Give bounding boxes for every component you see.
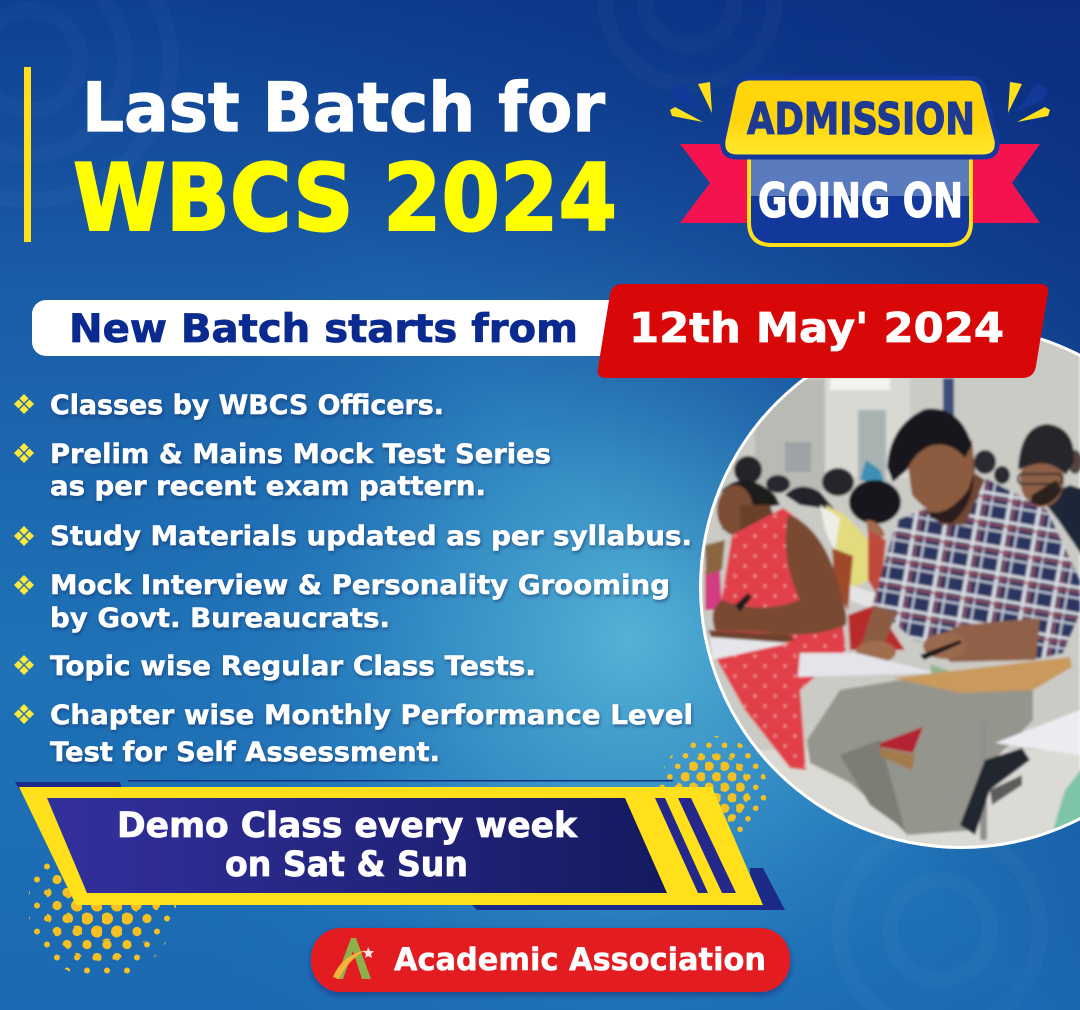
icon: bullet (14, 443, 34, 463)
trousers (807, 680, 1033, 835)
academic association pill (311, 928, 790, 992)
feature list (14, 390, 693, 768)
icon: bullet (14, 394, 34, 414)
papers (798, 653, 937, 677)
icon: bullet (14, 704, 34, 724)
admission plate: ADMISSION (747, 94, 975, 145)
man in plaid shirt (798, 409, 1080, 840)
title: Last Batch for (82, 69, 605, 148)
background students (734, 456, 762, 484)
title (73, 69, 617, 252)
halftone dots: lower left (28, 831, 176, 979)
admission plate (723, 78, 997, 157)
item: mock interview: Mock Interview & Personality Grooming (50, 570, 670, 601)
shirt (873, 477, 1080, 660)
white label: New Batch starts from (69, 307, 578, 352)
icon: left sparks (670, 82, 712, 122)
hair (887, 409, 972, 482)
ribbon (680, 144, 1040, 223)
item: performance test: Chapter wise Monthly Performance Level (50, 700, 693, 731)
woman in coral dress (708, 480, 846, 770)
icon: bullet (14, 575, 34, 595)
new batch bar (32, 284, 1048, 378)
item: performance test: Test for Self Assessment. (50, 737, 440, 768)
item: mock interview (14, 570, 670, 634)
accent bar (24, 67, 31, 242)
academic association pill: Academic Association (394, 942, 766, 978)
item: mock test series (14, 439, 551, 502)
patterned cloth (1052, 768, 1080, 829)
badge: admission going on (670, 78, 1050, 245)
item: mock interview: by Govt. Bureaucrats. (50, 603, 390, 634)
red date box: 12th May' 2024 (629, 304, 1004, 352)
paper on next desk (995, 710, 1080, 755)
item: class tests: Topic wise Regular Class Tests. (50, 651, 536, 682)
icon: academic association logo (333, 938, 374, 979)
title: WBCS 2024 (73, 144, 617, 252)
banner text: Demo Class every week (117, 806, 578, 846)
white label (32, 300, 632, 356)
photo: students writing in classroom (699, 320, 1080, 850)
neck and face (935, 470, 985, 525)
halftone dots: upper right (659, 736, 767, 844)
man at right (1046, 484, 1080, 556)
seat (880, 727, 923, 753)
desk (893, 657, 1072, 693)
floor (760, 750, 1080, 846)
going on panel: GOING ON (758, 174, 963, 229)
banner text: on Sat & Sun (225, 845, 468, 885)
item: mock test series: as per recent exam pattern. (50, 471, 486, 502)
icon: bullet (14, 655, 34, 675)
banner text (117, 806, 578, 885)
arms (861, 604, 896, 644)
wall (702, 340, 1080, 752)
red date box (598, 284, 1048, 378)
item: study materials: Study Materials updated as per syllabus. (50, 521, 692, 552)
icon: right sparks (1008, 82, 1050, 122)
going on panel (749, 155, 971, 245)
icon: bullet (14, 526, 34, 546)
demo class banner (15, 780, 785, 910)
item: mock test series: Prelim & Mains Mock Test Series (50, 439, 551, 470)
item: performance test (14, 700, 693, 768)
item: classes: Classes by WBCS Officers. (50, 390, 444, 421)
